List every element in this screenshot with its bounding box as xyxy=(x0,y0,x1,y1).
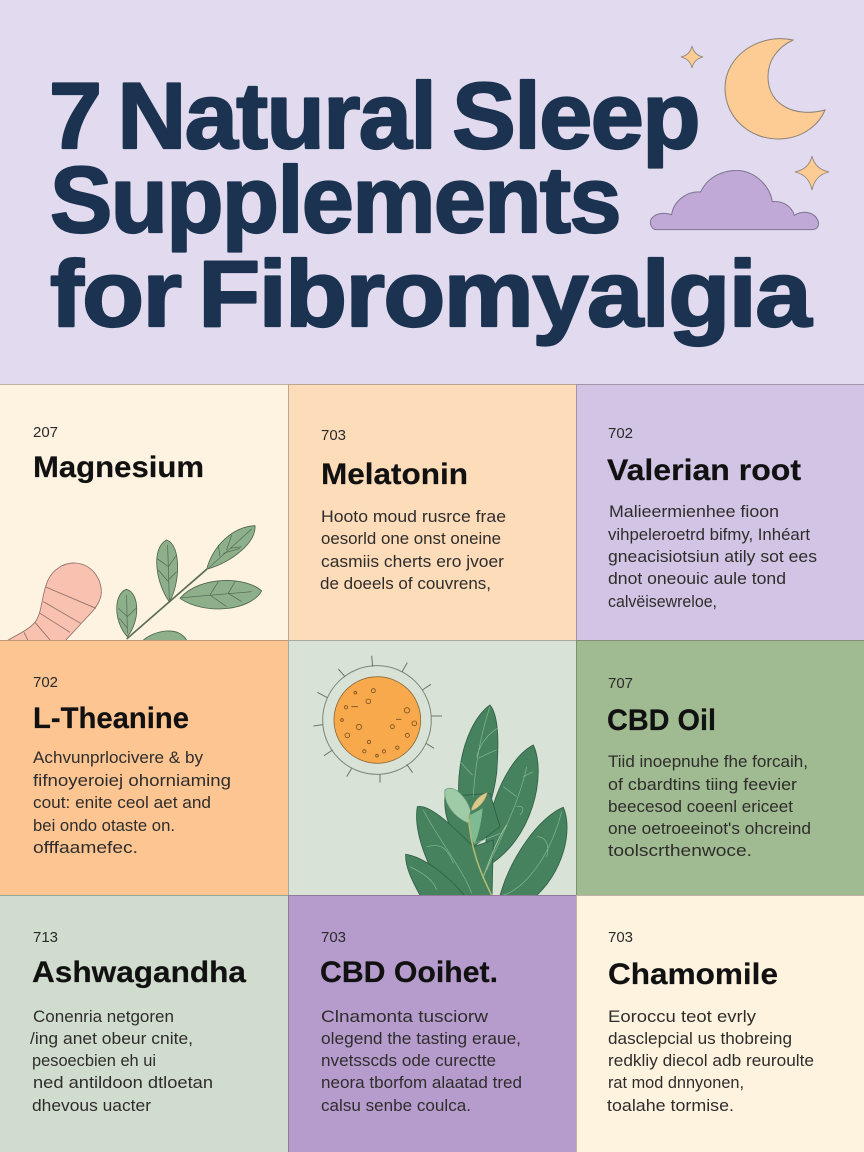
number: Ashwagandha: 713 xyxy=(33,930,58,946)
icon: large star xyxy=(795,156,829,190)
text: CBD Oil description: of cbardtins tiing feevier xyxy=(608,775,797,794)
icon: sun xyxy=(313,656,442,783)
text: L-Theanine description xyxy=(33,748,231,857)
panel: sun and leaves illustration xyxy=(288,640,576,898)
text: L-Theanine description: fifnoyeroiej ohorniaming xyxy=(33,771,231,790)
heading: CBD Oil: CBD Oil xyxy=(607,704,716,737)
text: Melatonin description: oesorld one onst oneine xyxy=(321,529,501,548)
text: L-Theanine description: offfaamefec. xyxy=(33,838,138,857)
number: Chamomile: 703 xyxy=(608,930,633,946)
text: CBD Oil description: toolscrthenwoce. xyxy=(608,841,752,860)
text: Ashwagandha description: pesoecbien eh ui xyxy=(32,1051,156,1070)
panel: Melatonin xyxy=(288,384,576,640)
text: Chamomile description: dasclepcial us thobreing xyxy=(608,1029,792,1048)
heading: Ashwagandha: Ashwagandha xyxy=(32,956,246,989)
number: CBD Oil: 707 xyxy=(608,676,633,692)
text: Valerian root description: calvëisewreloe, xyxy=(608,592,717,611)
text: Chamomile description: Eoroccu teot evrly xyxy=(608,1007,757,1026)
title xyxy=(49,63,812,346)
text: CBD Ooihet. description xyxy=(321,1007,522,1115)
panel: Ashwagandha xyxy=(0,895,288,1152)
text: Ashwagandha description: Conenria netgoren xyxy=(33,1007,174,1026)
text: Melatonin description: Hooto moud rusrce frae xyxy=(321,507,506,526)
text: CBD Oil description: Tiid inoepnuhe fhe forcaih, xyxy=(608,752,808,771)
text: Valerian root description: dnot oneouic aule tond xyxy=(608,569,786,588)
text: Ashwagandha description: /ing anet obeur cnite, xyxy=(30,1029,193,1048)
text: L-Theanine description: Achvunprlocivere & by xyxy=(33,748,203,767)
text: Ashwagandha description xyxy=(30,1007,213,1115)
text: L-Theanine description: cout: enite ceol aet and xyxy=(33,793,211,812)
heading: Valerian root: Valerian root xyxy=(607,454,801,487)
text: CBD Ooihet. description: calsu senbe coulca. xyxy=(321,1096,471,1115)
number: L-Theanine: 702 xyxy=(33,675,58,691)
text: Melatonin description: de doeels of couvrens, xyxy=(320,574,491,593)
title: for Fibromyalgia xyxy=(50,241,812,346)
number: Magnesium: 207 xyxy=(33,425,58,441)
icon: cloud xyxy=(650,170,819,230)
title: Supplements xyxy=(50,147,620,252)
number: Melatonin: 703 xyxy=(321,428,346,444)
text: CBD Oil description: beecesod coeenl ericeet xyxy=(608,797,793,816)
panel: CBD Ooihet. xyxy=(288,895,576,1152)
heading: Melatonin: Melatonin xyxy=(321,458,468,491)
text: CBD Oil description xyxy=(608,752,811,860)
text: Melatonin description xyxy=(320,507,506,593)
illustration: muscle and leaves xyxy=(7,526,262,642)
text: Valerian root description: vihpeleroetrd bifmy, Inhéart xyxy=(608,525,810,544)
panel: Valerian root xyxy=(576,384,864,640)
number: Valerian root: 702 xyxy=(608,426,633,442)
title: 7 Natural Sleep xyxy=(49,63,699,168)
panel: CBD Oil xyxy=(576,640,864,895)
icon: crescent moon xyxy=(725,39,825,139)
text: Ashwagandha description: dhevous uacter xyxy=(32,1096,151,1115)
text: Chamomile description: toalahe tormise. xyxy=(607,1096,734,1115)
heading: CBD Ooihet.: CBD Ooihet. xyxy=(320,956,498,989)
text: Valerian root description xyxy=(608,502,817,611)
panel: L-Theanine xyxy=(0,640,288,895)
text: Valerian root description: Malieermienhee fioon xyxy=(609,502,779,521)
panel: Magnesium xyxy=(0,384,288,642)
text: Melatonin description: casmiis cherts ero jvoer xyxy=(321,552,504,571)
text: Chamomile description: rat mod dnnyonen, xyxy=(608,1073,744,1092)
heading: Magnesium: Magnesium xyxy=(33,451,204,484)
text: Valerian root description: gneacisiotsiun atily sot ees xyxy=(608,547,817,566)
text: CBD Ooihet. description: nvetsscds ode curectte xyxy=(321,1051,496,1070)
panel: header xyxy=(0,0,864,384)
illustration: green leaves xyxy=(406,705,567,898)
text: Chamomile description xyxy=(607,1007,814,1115)
text: CBD Oil description: one oetroeeinot's ohcreind xyxy=(608,819,811,838)
text: CBD Ooihet. description: neora tborfom alaatad tred xyxy=(321,1073,522,1092)
text: Chamomile description: redkliy diecol adb reuroulte xyxy=(608,1051,814,1070)
panel: Chamomile xyxy=(576,895,864,1152)
icon: small star xyxy=(681,46,703,68)
text: CBD Ooihet. description: olegend the tasting eraue, xyxy=(321,1029,521,1048)
heading: L-Theanine: L-Theanine xyxy=(33,702,189,735)
text: Ashwagandha description: ned antildoon dtloetan xyxy=(33,1073,213,1092)
number: CBD Ooihet.: 703 xyxy=(321,930,346,946)
text: CBD Ooihet. description: Clnamonta tusciorw xyxy=(321,1007,489,1026)
text: L-Theanine description: bei ondo otaste on. xyxy=(33,816,175,835)
heading: Chamomile: Chamomile xyxy=(608,958,778,991)
